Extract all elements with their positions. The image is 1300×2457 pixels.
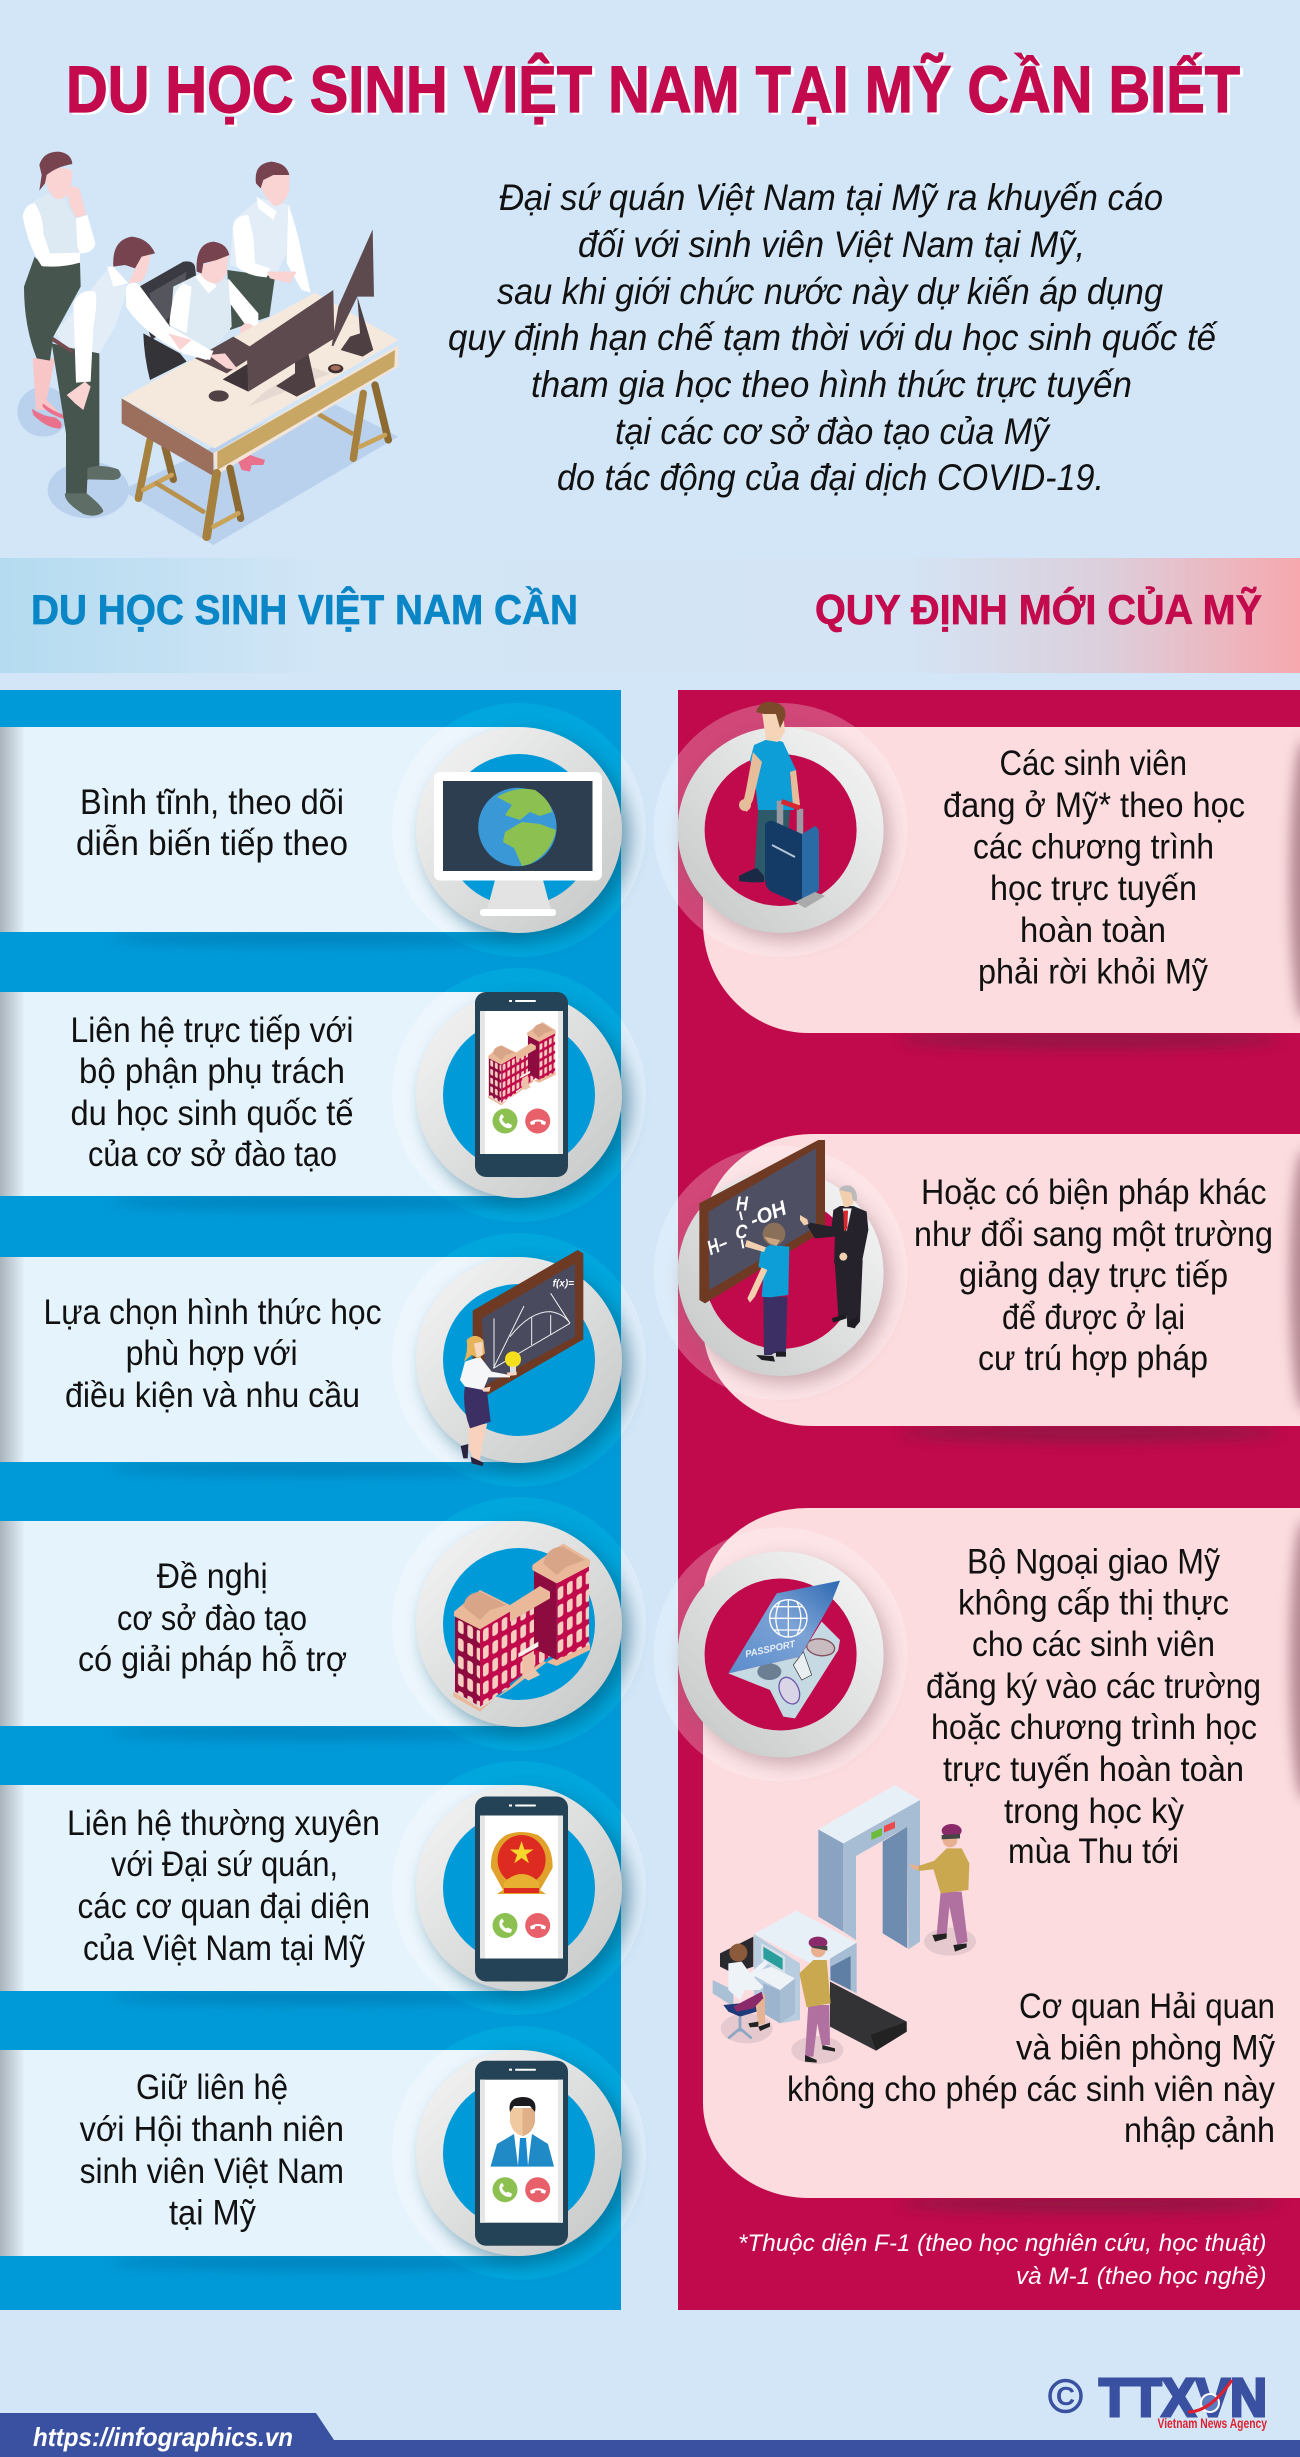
logo: TTXVN: TTXVN <box>1099 2368 1267 2428</box>
panel: right column <box>678 690 1300 2310</box>
text: right item 3: mùa Thu tới <box>1008 1832 1179 1871</box>
intro text: quy định hạn chế tạm thời với du học sinh quốc tế <box>448 317 1218 358</box>
text: right item 2 <box>914 1173 1273 1378</box>
text: right item 2: cư trú hợp pháp <box>978 1339 1208 1378</box>
text: right item 1: phải rời khỏi Mỹ <box>978 953 1208 992</box>
card: transfer option <box>703 1134 1300 1442</box>
text: left item 5: của Việt Nam tại Mỹ <box>83 1929 365 1968</box>
text: left item 5: các cơ quan đại diện <box>78 1887 370 1926</box>
icon: teacher and student at chalkboard: -OH <box>747 1196 791 1232</box>
text: right item 3: hoặc chương trình học <box>931 1708 1257 1747</box>
text: left item 1: diễn biến tiếp theo <box>76 824 348 863</box>
text: left item 1: Bình tĩnh, theo dõi <box>80 783 344 822</box>
text: right item 1: hoàn toàn <box>1020 911 1166 950</box>
text: right item 1: học trực tuyến <box>990 869 1197 908</box>
card: students must leave <box>703 727 1300 1049</box>
text: right item 3: Bộ Ngoại giao Mỹ <box>967 1542 1220 1582</box>
text: right item 4: Cơ quan Hải quan <box>1019 1987 1275 2026</box>
text: left item 2: du học sinh quốc tế <box>70 1094 354 1133</box>
text: right item 3: cho các sinh viên <box>972 1625 1215 1664</box>
text: left item 4: có giải pháp hỗ trợ <box>78 1640 347 1679</box>
icon: phone with national emblem <box>416 1785 630 1999</box>
illustration: airport security checkpoint <box>713 1785 976 2064</box>
icon: university building <box>416 1521 630 1735</box>
text: right item 1: Các sinh viên <box>1000 744 1187 783</box>
copyright mark <box>1050 2380 1081 2412</box>
footnote: và M-1 (theo học nghề) <box>1016 2263 1266 2290</box>
intro text: đối với sinh viên Việt Nam tại Mỹ, <box>578 224 1085 265</box>
text: left item 4: cơ sở đào tạo <box>117 1599 307 1638</box>
text: right item 3: trực tuyến hoàn toàn <box>943 1750 1244 1789</box>
text: right item 4 <box>787 1987 1275 2150</box>
card: visas and customs <box>703 1508 1300 2213</box>
intro text: sau khi giới chức nước này dự kiến áp dụng <box>497 271 1163 312</box>
intro text: tại các cơ sở đào tạo của Mỹ <box>615 411 1051 452</box>
text: left item 5: với Đại sứ quán, <box>111 1845 338 1884</box>
text: right item 1 <box>943 744 1245 992</box>
text: left item 5 <box>67 1804 380 1968</box>
icon: phone calling university <box>416 992 630 1206</box>
icon: monitor with globe <box>416 727 630 941</box>
text: left item 6: sinh viên Việt Nam <box>80 2152 344 2191</box>
heading: left column: DU HỌC SINH VIỆT NAM CẦN <box>31 585 578 633</box>
text: right item 4: và biên phòng Mỹ <box>1016 2028 1275 2068</box>
text: left item 2: bộ phận phụ trách <box>79 1052 345 1091</box>
text: right item 2: như đổi sang một trường <box>914 1215 1273 1254</box>
text: left item 6 <box>80 2068 344 2232</box>
text: right item 3 <box>926 1542 1261 1871</box>
icon: teacher at blackboard <box>416 1250 630 1471</box>
text: right item 4: không cho phép các sinh viên này <box>787 2070 1275 2109</box>
text: right item 2: để được ở lại <box>1002 1298 1185 1337</box>
icon: teacher at blackboard: f(x)= <box>553 1279 574 1290</box>
text: left item 2 <box>70 1011 354 1174</box>
intro text: tham gia học theo hình thức trực tuyến <box>531 364 1132 405</box>
footer url: https://infographics.vn <box>33 2422 293 2452</box>
text: left item 3: điều kiện và nhu cầu <box>65 1376 360 1415</box>
text: right item 2: Hoặc có biện pháp khác <box>921 1173 1266 1212</box>
illustration: people working at a desk <box>17 152 398 545</box>
text: left item 2: Liên hệ trực tiếp với <box>70 1011 354 1050</box>
text: left item 6: với Hội thanh niên <box>80 2110 344 2149</box>
text: right item 2: giảng dạy trực tiếp <box>959 1256 1228 1295</box>
icon: teacher and student at chalkboard: H– <box>704 1231 731 1260</box>
text: right item 3: không cấp thị thực <box>958 1584 1229 1623</box>
footer band <box>0 2413 1300 2457</box>
intro text: Đại sứ quán Việt Nam tại Mỹ ra khuyến cáo <box>499 177 1163 218</box>
icon: teacher and student at chalkboard: C <box>735 1221 748 1244</box>
text: right item 3: đăng ký vào các trường <box>926 1667 1261 1706</box>
icon: passport <box>654 1528 908 1782</box>
text: right item 1: đang ở Mỹ* theo học <box>943 786 1245 825</box>
footnote: *Thuộc diện F-1 (theo học nghiên cứu, học thuật) <box>738 2230 1266 2257</box>
icon: teacher and student at chalkboard: H <box>736 1193 749 1216</box>
intro text <box>448 177 1218 498</box>
text: left item 3: phù hợp với <box>126 1334 298 1373</box>
text: left item 3 <box>44 1293 382 1415</box>
icon: passport: PASSPORT <box>744 1639 797 1660</box>
text: left item 1 <box>76 783 348 863</box>
text: left item 2: của cơ sở đào tạo <box>88 1135 337 1174</box>
icon: teacher and student at chalkboard <box>654 1140 908 1400</box>
text: left item 6: Giữ liên hệ <box>136 2068 288 2107</box>
footnote <box>738 2230 1266 2290</box>
text: left item 6: tại Mỹ <box>169 2194 256 2232</box>
icon: student with suitcase <box>654 702 908 957</box>
text: right item 1: các chương trình <box>973 828 1214 867</box>
text: right item 4: nhập cảnh <box>1124 2111 1275 2150</box>
text: left item 4: Đề nghị <box>157 1557 268 1596</box>
panel: left column <box>0 690 646 2310</box>
icon: phone with man in suit <box>416 2050 630 2264</box>
intro text: do tác động của đại dịch COVID-19. <box>557 457 1104 498</box>
text: left item 4 <box>78 1557 347 1679</box>
heading: right column: QUY ĐỊNH MỚI CỦA MỸ <box>815 585 1262 633</box>
section header band <box>0 558 1300 673</box>
text: left item 3: Lựa chọn hình thức học <box>44 1293 382 1332</box>
text: left item 5: Liên hệ thường xuyên <box>67 1804 380 1843</box>
text: right item 3: trong học kỳ <box>1004 1792 1184 1831</box>
copyright mark: C <box>1056 2381 1075 2411</box>
